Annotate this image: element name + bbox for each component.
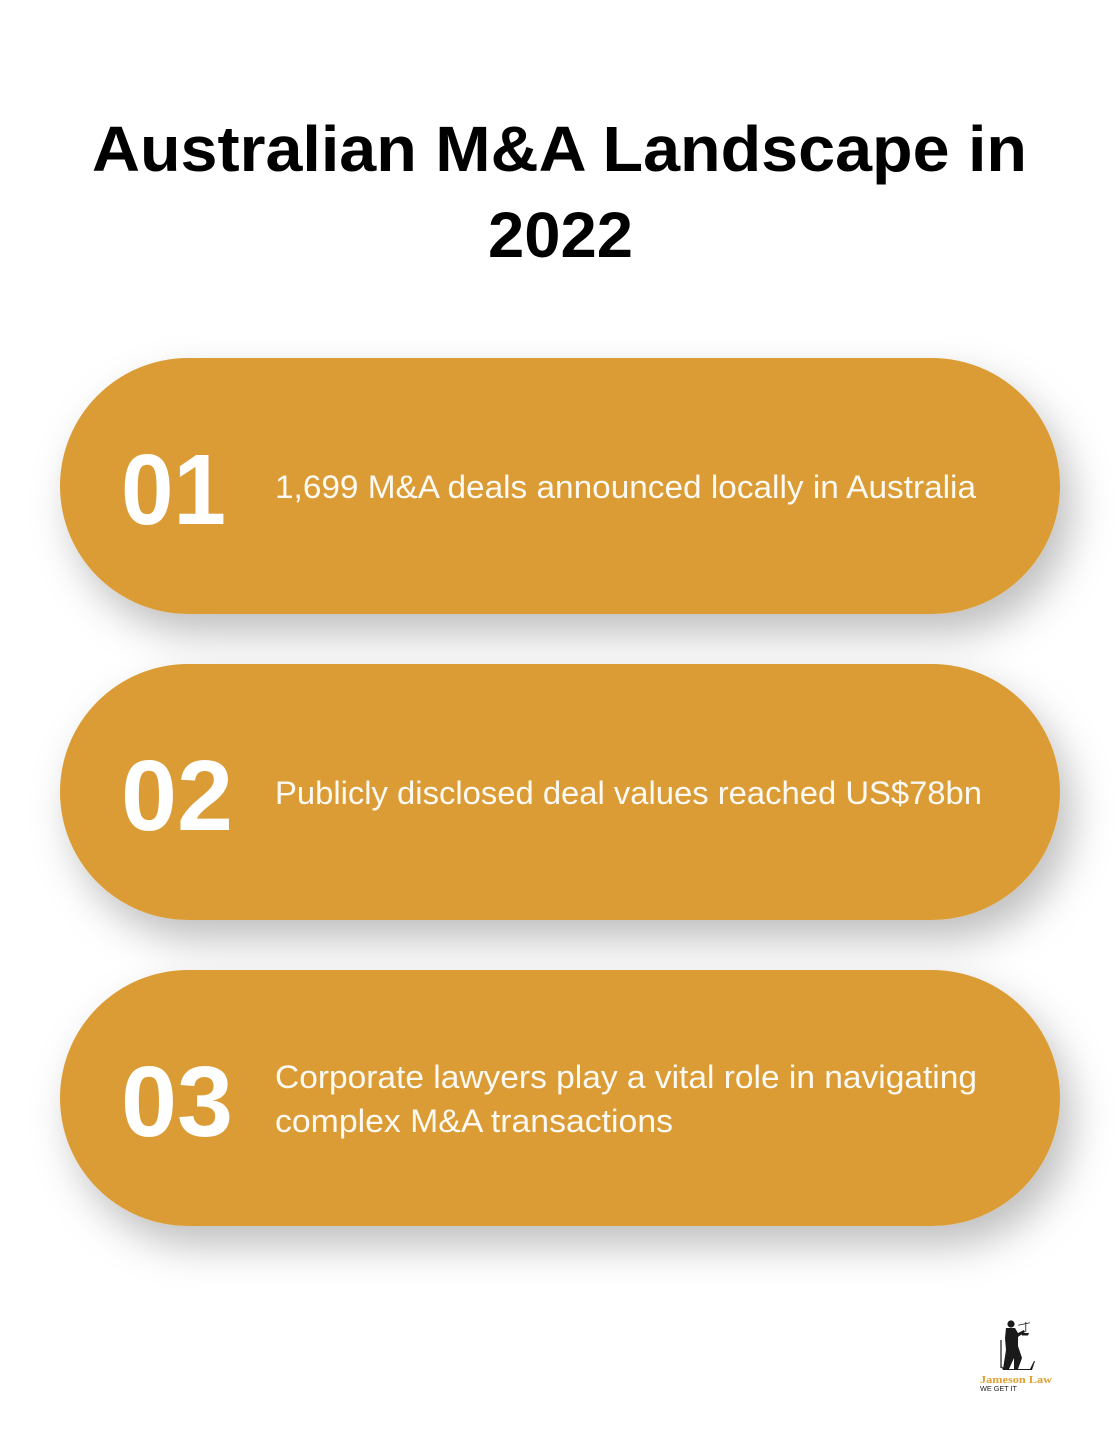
tagline: WE GET IT [980, 1384, 1017, 1393]
panel: item 03 [60, 970, 1060, 1226]
title [92, 113, 1027, 271]
text: corporate lawyers: Corporate lawyers play a vital role in navigating [275, 1059, 977, 1095]
title: 2022 [488, 199, 633, 271]
logo: Jameson Law [980, 1320, 1052, 1393]
number 01: 01 [121, 434, 226, 546]
icon: lady justice [1000, 1320, 1035, 1370]
number 02: 02 [121, 740, 233, 852]
text: corporate lawyers: complex M&A transactions [275, 1103, 673, 1139]
text: deal values: Publicly disclosed deal values reached US$78bn [275, 775, 982, 811]
panel: item 01 [60, 358, 1060, 614]
text: corporate lawyers [275, 1059, 977, 1139]
text: deals announced: 1,699 M&A deals announced locally in Australia [275, 469, 976, 505]
number 03: 03 [121, 1046, 233, 1158]
brand name: Jameson Law [980, 1374, 1052, 1386]
panel: item 02 [60, 664, 1060, 920]
title: Australian M&A Landscape in [92, 113, 1027, 185]
